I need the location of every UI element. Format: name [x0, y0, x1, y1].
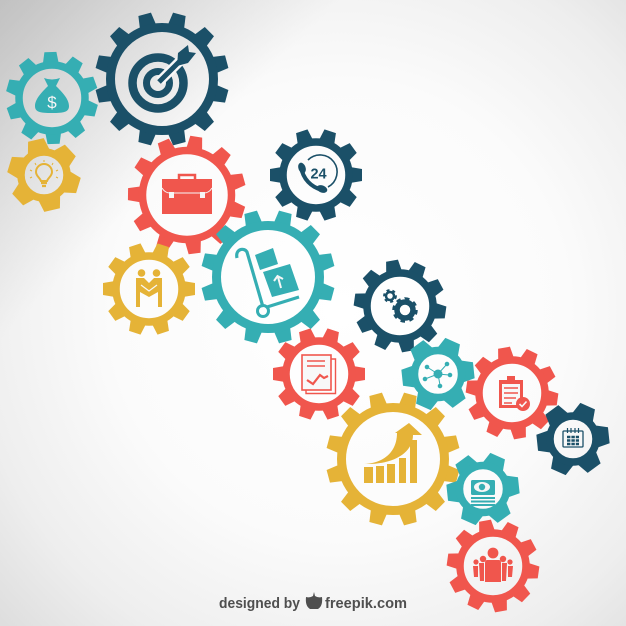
gear: handshake (yellow)	[103, 243, 195, 335]
gear: growth chart (yellow)	[326, 392, 460, 526]
icon: light bulb	[30, 160, 58, 186]
gear: 24 hour call (dark)	[270, 129, 362, 221]
icon: money bag: $	[47, 93, 57, 112]
gear: briefcase (red)	[128, 135, 246, 255]
gear: clipboard (red)	[460, 341, 564, 445]
icon: two people shaking hands	[136, 269, 162, 307]
gear: report (red)	[273, 328, 365, 420]
icon: briefcase	[162, 175, 212, 214]
icon: 24 hour phone: 24	[310, 166, 327, 182]
icon: target with arrow	[132, 45, 196, 108]
icon: two cogs	[384, 290, 416, 321]
icon: report with line chart	[302, 355, 336, 394]
icon: calendar	[563, 428, 583, 447]
footer: attribution: freepik.com	[325, 595, 407, 612]
gear: cash (teal)	[435, 441, 531, 537]
icon: rising bar chart with arrow	[364, 423, 422, 483]
gear: target (dark)	[95, 12, 229, 146]
gear: hand truck (teal)	[201, 210, 335, 344]
icon: group of people	[473, 548, 513, 582]
footer: attribution	[219, 592, 407, 612]
gear: network (teal)	[390, 326, 486, 422]
gear: money bag (teal)	[0, 41, 109, 155]
icon: network nodes	[423, 362, 452, 388]
gear: light bulb (yellow)	[0, 132, 88, 218]
icon: hand truck with boxes	[237, 248, 299, 316]
gear: team (red)	[441, 514, 545, 618]
gear: cogs (dark)	[348, 254, 452, 358]
icon: freepik logo	[306, 592, 322, 609]
icon: stack of banknotes	[471, 480, 495, 505]
footer: attribution: designed by	[219, 595, 301, 612]
gear: calendar (dark)	[525, 391, 621, 487]
icon: clipboard with check	[499, 376, 530, 411]
